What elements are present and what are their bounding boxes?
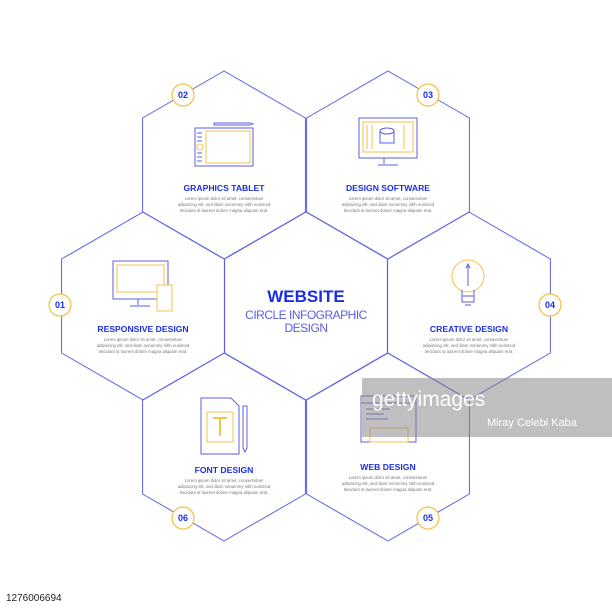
icon: font design xyxy=(201,398,247,454)
badge numbers: 04 xyxy=(545,300,555,310)
watermark: gettyimages xyxy=(372,388,485,411)
body text: Lorem ipsum dolor sit amet, consectetuer xyxy=(349,475,428,480)
watermark: Miray Celebi Kaba xyxy=(487,417,578,429)
badge numbers: 05 xyxy=(423,513,433,523)
icon: design software xyxy=(359,118,417,165)
number badges xyxy=(49,84,561,529)
image id: 1276006694 xyxy=(6,593,62,604)
labels xyxy=(97,183,508,475)
body text: tincidunt ut laoreet dolore magna aliquam erat. xyxy=(180,490,268,495)
icon: responsive design xyxy=(113,261,172,311)
watermark xyxy=(362,378,612,437)
title: DESIGN xyxy=(284,321,328,335)
labels: FONT DESIGN xyxy=(195,465,253,475)
body text: adipiscing elit, sed diam nonummy nibh euismod xyxy=(178,484,271,489)
body text: Lorem ipsum dolor sit amet, consectetuer xyxy=(349,196,428,201)
body text xyxy=(97,196,516,495)
body text: tincidunt ut laoreet dolore magna aliquam erat. xyxy=(425,349,513,354)
badge numbers: 06 xyxy=(178,513,188,523)
title xyxy=(245,287,368,335)
body text: adipiscing elit, sed diam nonummy nibh euismod xyxy=(342,202,435,207)
body text: adipiscing elit, sed diam nonummy nibh euismod xyxy=(97,343,190,348)
hexagon grid xyxy=(62,71,550,541)
body text: tincidunt ut laoreet dolore magna aliquam erat. xyxy=(344,208,432,213)
body text: tincidunt ut laoreet dolore magna aliquam erat. xyxy=(180,208,268,213)
body text: Lorem ipsum dolor sit amet, consectetuer xyxy=(430,337,509,342)
badge numbers: 02 xyxy=(178,90,188,100)
body text: adipiscing elit, sed diam nonummy nibh euismod xyxy=(342,481,435,486)
body text: tincidunt ut laoreet dolore magna aliquam erat. xyxy=(99,349,187,354)
badge numbers: 01 xyxy=(55,300,65,310)
title: CIRCLE INFOGRAPHIC xyxy=(245,308,368,322)
labels: CREATIVE DESIGN xyxy=(430,324,508,334)
icon: web design xyxy=(361,396,416,442)
labels: GRAPHICS TABLET xyxy=(183,183,265,193)
badge numbers: 03 xyxy=(423,90,433,100)
body text: Lorem ipsum dolor sit amet, consectetuer xyxy=(104,337,183,342)
title: WEBSITE xyxy=(267,287,345,306)
labels: DESIGN SOFTWARE xyxy=(346,183,430,193)
labels: RESPONSIVE DESIGN xyxy=(97,324,189,334)
labels: WEB DESIGN xyxy=(360,462,416,472)
badge numbers xyxy=(55,90,555,523)
icon: graphics tablet xyxy=(195,123,253,166)
body text: adipiscing elit, sed diam nonummy nibh euismod xyxy=(178,202,271,207)
body text: adipiscing elit, sed diam nonummy nibh euismod xyxy=(423,343,516,348)
body text: Lorem ipsum dolor sit amet, consectetuer xyxy=(185,196,264,201)
body text: tincidunt ut laoreet dolore magna aliquam erat. xyxy=(344,487,432,492)
body text: Lorem ipsum dolor sit amet, consectetuer xyxy=(185,478,264,483)
icon: creative design xyxy=(452,260,484,305)
